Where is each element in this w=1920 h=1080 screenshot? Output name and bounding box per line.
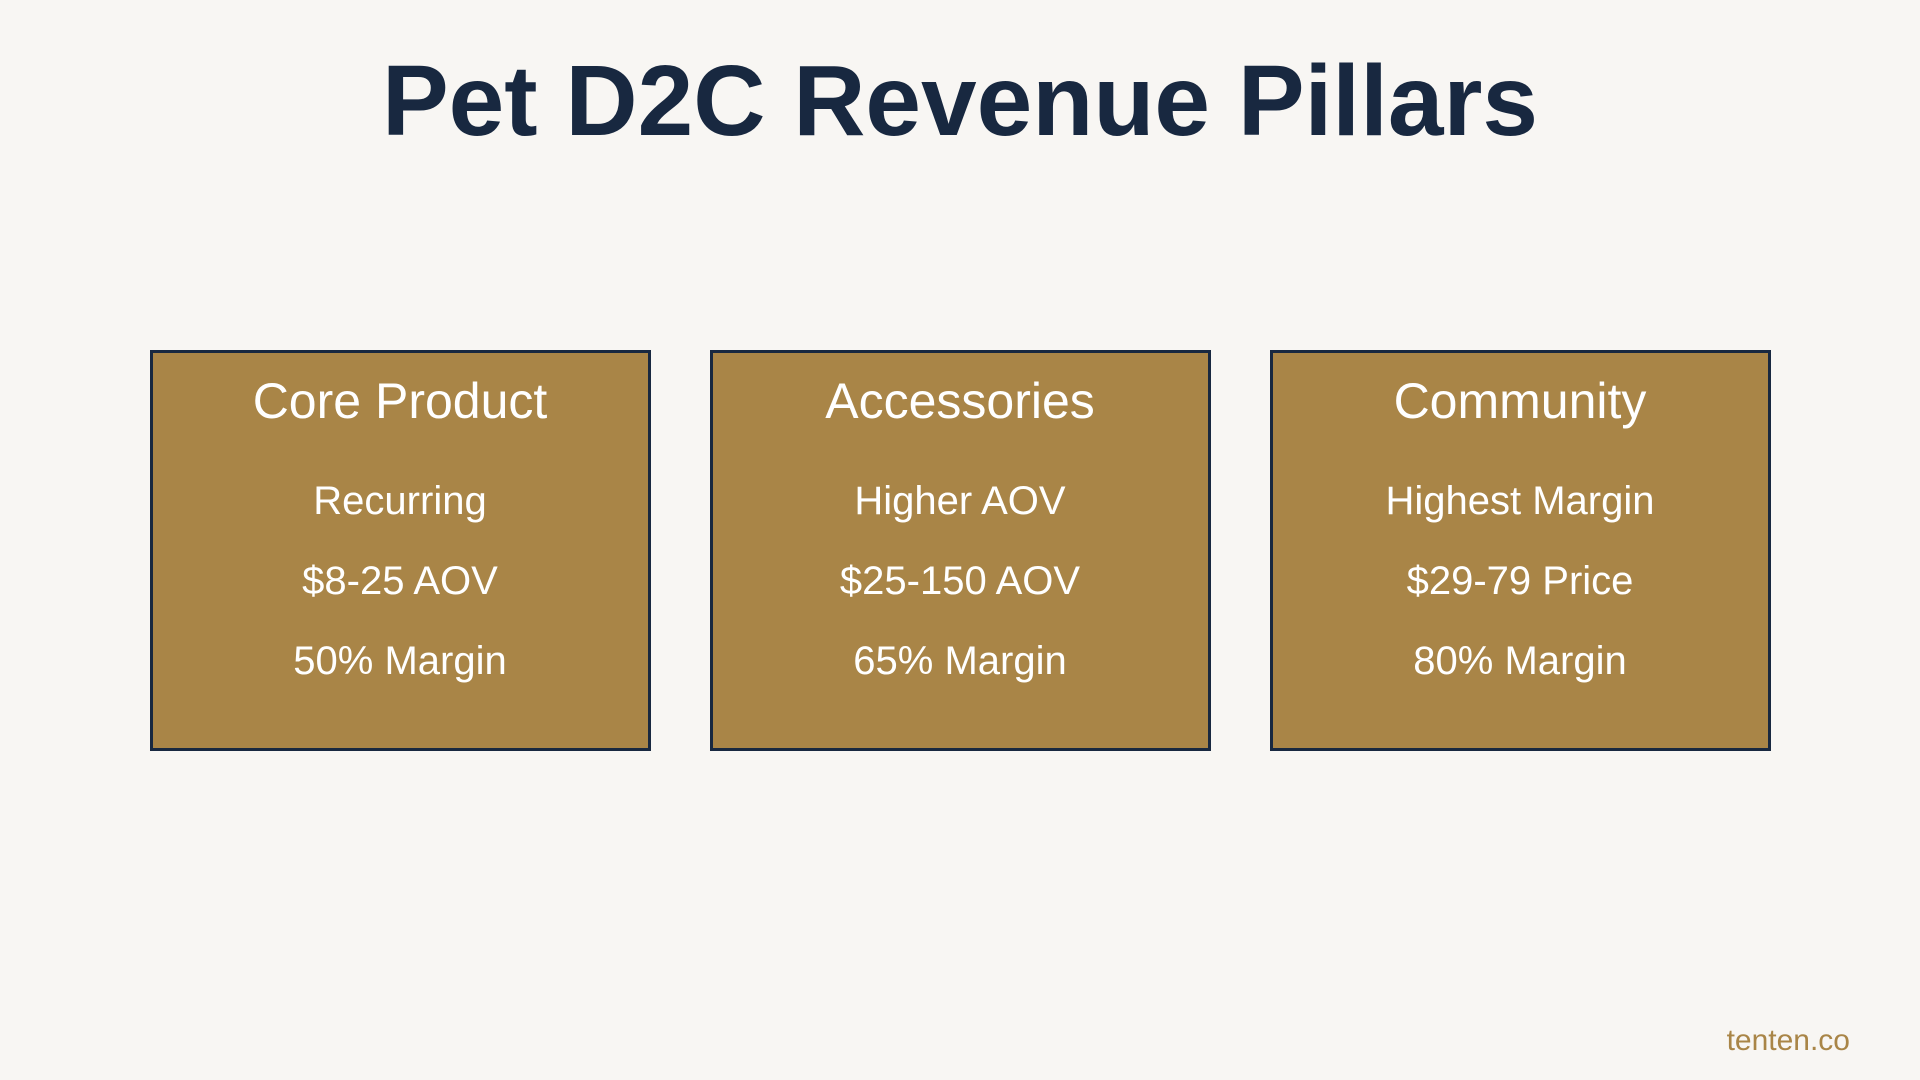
panel: Community: [1272, 352, 1770, 750]
text: AOV range: $8-25 AOV: [302, 559, 498, 603]
heading: Accessories: Accessories: [825, 373, 1095, 429]
text: AOV range: $25-150 AOV: [840, 559, 1080, 603]
text: margin: 50% Margin: [293, 639, 507, 683]
panel: Core Product: [152, 352, 650, 750]
heading: Core Product: Core Product: [253, 373, 547, 429]
card background: Community: [1272, 352, 1770, 750]
text: Higher AOV: Higher AOV: [854, 479, 1066, 523]
panel: Accessories: [712, 352, 1210, 750]
text: price range: $29-79 Price: [1407, 559, 1633, 603]
card background: Accessories: [712, 352, 1210, 750]
text: Recurring: Recurring: [313, 479, 487, 523]
title: Pet D2C Revenue Pillars: [382, 45, 1538, 157]
text: margin: 80% Margin: [1413, 639, 1627, 683]
heading: Community: Community: [1394, 373, 1646, 429]
card background: Core Product: [152, 352, 650, 750]
text: margin: 65% Margin: [853, 639, 1067, 683]
text: Highest Margin: Highest Margin: [1385, 479, 1655, 523]
brand footer: tenten.co: [1727, 1024, 1850, 1057]
